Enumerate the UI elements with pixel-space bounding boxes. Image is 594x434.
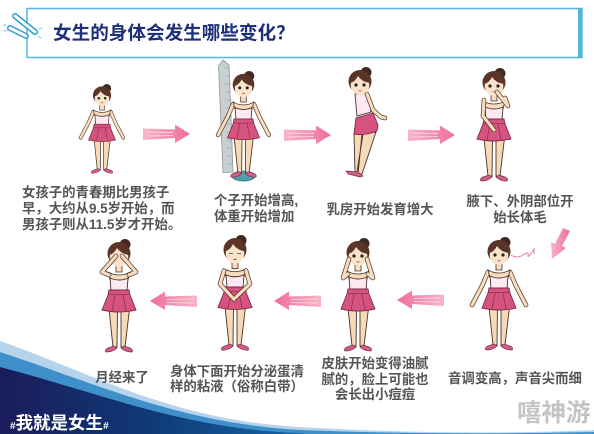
step 2: scale <box>232 171 255 181</box>
step 6: girl <box>341 238 375 351</box>
step 7 text <box>170 363 304 394</box>
step 6 text <box>321 355 429 402</box>
bottom wave banner <box>0 341 594 434</box>
step 7 text: 样的粘液（俗称白带） <box>170 378 304 394</box>
arrow: diagonal <box>551 228 570 259</box>
step 1 text: 男孩子则从11.5岁才开始。 <box>22 216 181 232</box>
arrow 2 <box>284 126 331 144</box>
arrow 4 <box>397 290 444 309</box>
title: 女生的身体会发生哪些变化？ <box>53 22 295 44</box>
arrow 1 <box>143 124 190 143</box>
icon: voice note <box>511 249 534 257</box>
watermark: 嘻神游 <box>517 399 590 427</box>
step 7: girl <box>218 235 252 350</box>
step 4 text <box>466 193 574 225</box>
step 6 text: 腻的，脸上可能也 <box>321 371 429 387</box>
step 1 text <box>22 184 181 232</box>
step 4: girl <box>477 68 511 181</box>
step 1 text: 早，大约从9.5岁开始，而 <box>22 200 175 216</box>
arrow 6 <box>150 292 197 310</box>
step 2: girl <box>218 71 269 177</box>
step 1: girl <box>81 84 123 173</box>
step 2 text <box>214 192 298 224</box>
arrow 5 <box>274 292 321 310</box>
step 2: ruler <box>218 60 233 172</box>
step 1 text: 女孩子的青春期比男孩子 <box>22 184 169 200</box>
step 8 text: 月经来了 <box>95 369 149 385</box>
step 6 text: 会长出小痘痘 <box>335 386 415 402</box>
step 5 text: 音调变高，声音尖而细 <box>448 370 582 386</box>
step 7 text: 身体下面开始分泌蛋清 <box>170 363 304 379</box>
header box <box>3 8 582 58</box>
step 4 text: 腋下、外阴部位开 <box>466 193 574 209</box>
step 2 text: 体重开始增加 <box>214 208 294 224</box>
step 5: girl <box>472 237 534 350</box>
arrow 3 <box>408 126 455 144</box>
step 2 text: 个子开始增高, <box>214 192 298 208</box>
step 8: girl <box>102 239 136 352</box>
step 3 text: 乳房开始发育增大 <box>326 201 434 217</box>
hashtag: #我就是女生# <box>10 413 109 433</box>
step 6 text: 皮肤开始变得油腻 <box>321 355 429 371</box>
step 4 text: 始长体毛 <box>493 209 547 225</box>
icon: pencils <box>3 16 42 43</box>
step 3: girl <box>346 67 385 177</box>
